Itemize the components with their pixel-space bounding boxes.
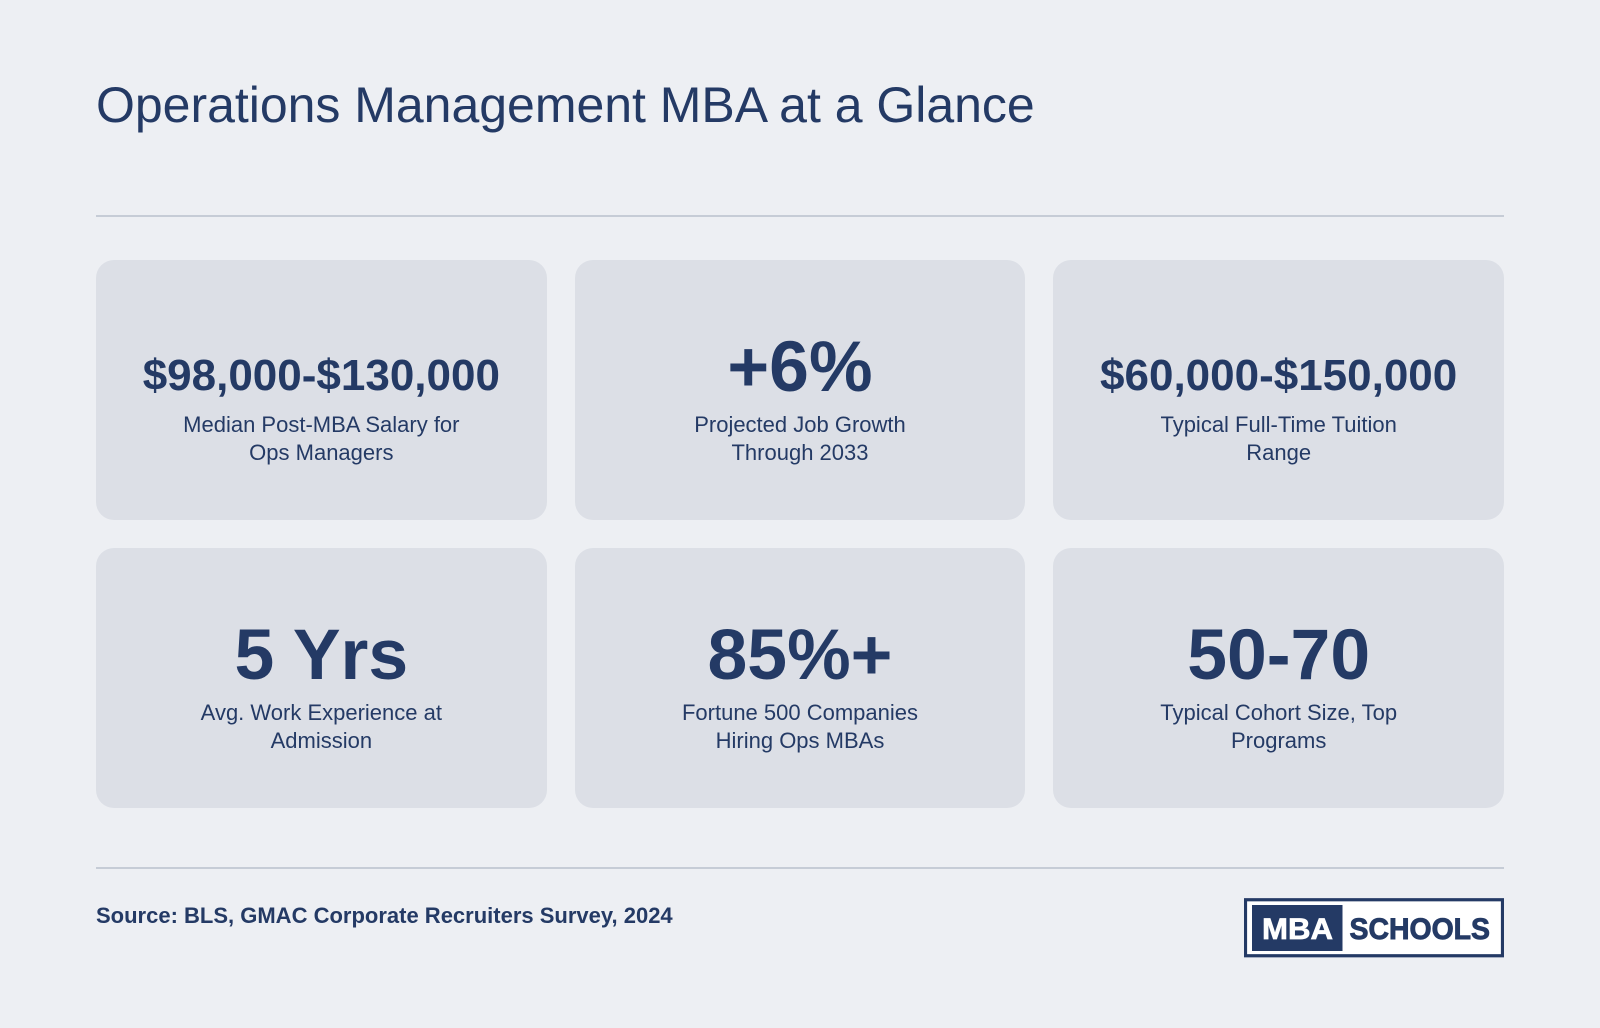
- stat label: cohort size: [1160, 700, 1397, 753]
- stat label: cohort size: Typical Cohort Size, Top: [1160, 700, 1397, 725]
- stat value: fortune 500 hiring: 85%+: [708, 615, 892, 695]
- stat label: work experience: Avg. Work Experience at: [201, 700, 442, 725]
- title: Operations Management MBA at a Glance: [96, 77, 1035, 133]
- stat label: job growth: [694, 412, 906, 465]
- panel: median salary: [96, 260, 547, 520]
- stat value: cohort size: 50-70: [1187, 615, 1370, 695]
- panel: work experience: [96, 548, 547, 808]
- stat label: work experience: Admission: [271, 728, 372, 753]
- stat label: job growth: Through 2033: [731, 440, 868, 465]
- stat label: fortune 500 hiring: Fortune 500 Companies: [682, 700, 918, 725]
- stat value: job growth: +6%: [727, 327, 873, 407]
- stat label: salary: [183, 412, 460, 465]
- stat label: job growth: Projected Job Growth: [694, 412, 906, 437]
- panel: fortune 500 hiring: [575, 548, 1025, 808]
- stat label: fortune 500 hiring: Hiring Ops MBAs: [716, 728, 884, 753]
- logo: MBA Schools: SCHOOLS: [1350, 913, 1490, 946]
- stat label: salary: Median Post-MBA Salary for: [183, 412, 460, 437]
- panel: cohort size: [1053, 548, 1504, 808]
- panel: tuition: [1053, 260, 1504, 520]
- stat label: salary: Ops Managers: [249, 440, 393, 465]
- source note: Source: BLS, GMAC Corporate Recruiters Survey, 2024: [96, 903, 673, 928]
- stat label: cohort size: Programs: [1231, 728, 1326, 753]
- stat label: work experience: [200, 700, 442, 753]
- logo: MBA Schools: MBA: [1262, 913, 1333, 946]
- stat label: tuition: Typical Full-Time Tuition: [1160, 412, 1397, 437]
- stat value: tuition: $60,000-$150,000: [1100, 351, 1457, 400]
- logo: MBA Schools: [1244, 898, 1504, 958]
- stat label: tuition: Range: [1246, 440, 1311, 465]
- panel: job growth: [575, 260, 1025, 520]
- stat value: work experience: 5 Yrs: [235, 615, 408, 695]
- stat value: salary: $98,000-$130,000: [143, 351, 500, 400]
- stat label: fortune 500 hiring: [682, 700, 918, 753]
- stat label: tuition: [1160, 412, 1397, 465]
